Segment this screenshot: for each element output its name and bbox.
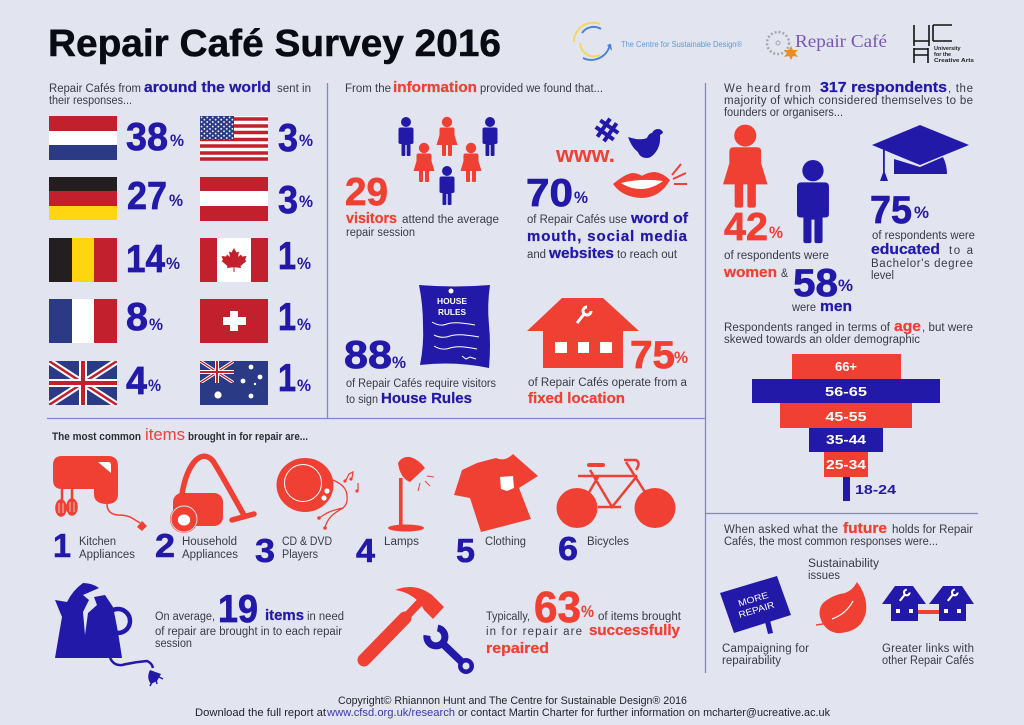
stat: 19 items per session: items [265, 607, 304, 624]
stat: 88%: 88 [344, 334, 392, 377]
age intro text: skewed towards an older demographic [724, 334, 920, 346]
label: household appliances [182, 536, 238, 561]
logo: Centre for Sustainable Design [574, 23, 742, 60]
stat: France 8%: 8 [126, 296, 148, 339]
stat: Netherlands 38%: % [170, 131, 184, 150]
stat: 75% fixed location [528, 334, 688, 407]
icon: house rules notice: HOUSE [437, 296, 467, 306]
stat: 88%: to sign [346, 394, 378, 406]
stat: 75% educated: Bachelor's degree [871, 258, 973, 270]
logo: University for the Creative Arts [914, 25, 974, 64]
stat: Austria 3%: % [299, 192, 313, 211]
label: sustainability issues [808, 558, 879, 582]
information intro text: From the [345, 83, 391, 95]
number: 6: 6 [558, 530, 578, 567]
stat: 88%: House Rules [381, 390, 472, 407]
countries intro text: sent in [277, 83, 311, 95]
items intro text: brought in for repair are... [188, 431, 308, 443]
logo: University for the Creative Arts: University [934, 46, 962, 52]
stat: 29 visitors: 29 [345, 171, 388, 214]
logos [574, 23, 974, 64]
stat: 75% educated: of respondents were [872, 230, 975, 242]
logo: Centre for Sustainable Design: The Centre for Sustainable Design® [621, 40, 742, 49]
flag: Australia [200, 361, 268, 405]
future intro text: Cafés, the most common responses were... [724, 536, 938, 548]
label: household appliances: Appliances [182, 549, 238, 561]
stat: 19 items per session: session [155, 638, 192, 650]
stat: 75% educated: % [914, 203, 929, 222]
icon: vacuum cleaner [170, 456, 254, 533]
stat: 75% educated: to a [949, 245, 974, 257]
icon: leaf [816, 582, 866, 633]
label: bicycles: Bicycles [587, 536, 629, 548]
label: clothing: Clothing [485, 536, 526, 548]
flag: Austria [200, 177, 268, 221]
icon: lamp [388, 457, 434, 532]
stat: Switzerland 1% [278, 296, 311, 339]
stat: Belgium 14%: % [166, 254, 180, 273]
stat: Australia 1%: % [297, 376, 311, 395]
stat: 63% successfully repaired: Typically, [486, 611, 530, 623]
stat: 42% women and 58% men: of respondents were [724, 250, 829, 262]
information intro text: information [393, 79, 477, 96]
stat: 70%: mouth, social media [527, 228, 688, 245]
future intro text: holds for Repair [892, 524, 973, 536]
stat: 19 items per session [155, 588, 344, 650]
panel: information [344, 79, 689, 407]
flag: Belgium [49, 238, 117, 282]
stat: 19 items per session: of repair are brought in to each repair [155, 626, 342, 638]
logo: Repair Café [767, 31, 887, 60]
icon: man [797, 160, 829, 243]
logo: University for the Creative Arts: Creative Arts [934, 58, 974, 64]
flag: United States [200, 116, 268, 160]
stat: 70%: of Repair Cafés use [527, 214, 627, 226]
respondents intro text: 317 respondents [820, 79, 947, 96]
stat: 42% women and 58% men: women [723, 264, 777, 281]
respondents intro text: , the [948, 83, 973, 95]
future intro text [724, 520, 973, 548]
stat: Australia 1% [278, 357, 311, 400]
countries intro text: Repair Cafés from [49, 83, 141, 95]
flag: Canada [200, 238, 268, 282]
icon: repair cafe building [527, 298, 639, 368]
stat: United States 3%: % [299, 131, 313, 150]
icon: woman [723, 125, 768, 208]
stat: 70%: 70 [526, 172, 573, 215]
icon: more repair sign [720, 576, 791, 634]
stat: 75% educated: 75 [870, 189, 912, 232]
items intro text [52, 425, 308, 444]
stat: Australia 1%: 1 [278, 357, 296, 400]
stat: Germany 27%: % [169, 191, 183, 210]
stat: United States 3%: 3 [278, 117, 298, 160]
bar: 56-65: 56-65 [825, 384, 867, 399]
stat: 63% successfully repaired: % [581, 602, 594, 621]
icon: broken kettle [55, 583, 163, 686]
stat: 70% [526, 172, 689, 262]
age intro text: age [894, 318, 921, 335]
stat: 75% fixed location: fixed location [528, 390, 625, 407]
label: greater links: other Repair Cafés [882, 655, 974, 667]
stat: 63% successfully repaired: in for repair are [486, 626, 582, 638]
stat: United States 3% [278, 117, 313, 160]
stat: 19 items per session: 19 [218, 588, 258, 631]
icon: bicycle [556, 460, 676, 528]
stat: 63% successfully repaired: 63 [534, 583, 581, 632]
panel: respondents [723, 79, 975, 501]
flag: France [49, 299, 117, 343]
bar: 25-34 [824, 452, 868, 477]
number: 4: 4 [356, 532, 376, 569]
chart: age pyramid [752, 354, 940, 501]
number: 3: 3 [255, 532, 275, 569]
icon: more repair sign: REPAIR [737, 599, 776, 620]
stat: 29 visitors: repair session [346, 227, 415, 239]
icon: more repair sign: MORE [737, 590, 770, 609]
age intro text [724, 318, 973, 346]
stat: 42% women and 58% men: & [781, 268, 788, 280]
icon: lips [613, 164, 687, 198]
stat: 75% educated [870, 189, 975, 282]
stat: 75% fixed location: of Repair Cafés operate from a [528, 377, 688, 389]
label: campaigning for repairability: repairability [722, 655, 781, 667]
bar: 66+: 66+ [835, 359, 857, 374]
flag: Switzerland [200, 299, 268, 343]
stat: 70%: word of [630, 210, 689, 227]
respondents intro text: founders or organisers... [724, 107, 843, 119]
age intro text: , but were [922, 322, 973, 334]
stat: 75% fixed location: % [674, 348, 688, 367]
label: CD and DVD players [282, 536, 332, 561]
label: greater links [882, 643, 974, 667]
future intro text: When asked what the [724, 524, 838, 536]
stat: United Kingdom 4%: % [148, 376, 161, 395]
label: campaigning for repairability [722, 643, 809, 667]
number: 2: 2 [155, 527, 175, 564]
stat: 70%: % [574, 188, 588, 207]
label: greater links: Greater links with [882, 643, 974, 655]
age intro text: Respondents ranged in terms of [724, 322, 891, 334]
bar: 35-44: 35-44 [826, 432, 867, 447]
footer credits: Download the full report at [195, 707, 326, 719]
items intro text: items [145, 425, 185, 444]
label: lamps: Lamps [384, 536, 419, 548]
stat: 70%: to reach out [617, 249, 678, 261]
label: kitchen appliances: Appliances [79, 549, 135, 561]
bar: 45-55: 45-55 [826, 409, 866, 424]
panel: common items [52, 425, 676, 569]
stat: 88% [344, 334, 496, 407]
stat: 75% fixed location: 75 [630, 334, 675, 377]
icon: hashtag [592, 115, 622, 145]
stat: Canada 1%: % [297, 254, 311, 273]
stat: 70%: websites [548, 245, 614, 262]
stat: 75% educated: level [871, 270, 894, 282]
label: CD and DVD players: CD & DVD [282, 536, 332, 548]
icon: linked repair cafes [882, 586, 974, 621]
stat: 29 visitors: visitors [346, 210, 397, 227]
stat: 75% educated: educated [871, 241, 940, 258]
icon: group of visitors [398, 117, 498, 205]
label: sustainability issues: Sustainability [808, 558, 879, 570]
title: Repair Café Survey 2016 [48, 23, 501, 65]
label: CD and DVD players: Players [282, 549, 318, 561]
stat: 63% successfully repaired: of items brought [598, 611, 682, 623]
bar: 18-24: 18-24 [855, 482, 897, 497]
bar: 25-34: 25-34 [826, 457, 867, 472]
stat: 42% women and 58% men: % [769, 223, 783, 242]
label: kitchen appliances: Kitchen [79, 536, 116, 548]
stat: 63% successfully repaired: successfully [589, 622, 681, 639]
icon: graduation cap [872, 125, 969, 181]
information intro text: provided we found that... [480, 83, 603, 95]
stat: 29 visitors: attend the average [402, 214, 499, 226]
stat: France 8%: % [149, 315, 163, 334]
stat: 29 visitors [345, 171, 499, 239]
icon: hand mixer [53, 456, 147, 531]
label: sustainability issues: issues [808, 570, 840, 582]
stat: Germany 27%: 27 [127, 175, 167, 218]
icon: house rules notice: RULES [438, 307, 466, 317]
footer credits: www.cfsd.org.uk/research [326, 707, 455, 719]
stat: 19 items per session: in need [307, 611, 344, 623]
logo: Repair Café: Repair Café [795, 31, 887, 51]
icon: t-shirt [454, 454, 538, 532]
flag: United Kingdom [49, 361, 117, 405]
stat: 19 items per session: On average, [155, 611, 215, 623]
respondents intro text [724, 79, 973, 119]
stat: 42% women and 58% men: men [820, 298, 852, 315]
bar: 18-24 [843, 477, 897, 501]
countries intro text: their responses... [49, 95, 132, 107]
label: kitchen appliances [79, 536, 135, 561]
stat: Canada 1% [278, 235, 311, 278]
future intro text: future [843, 520, 887, 537]
stat: Switzerland 1%: % [297, 315, 311, 334]
stat: France 8% [126, 296, 163, 339]
icon: www: www. [555, 142, 615, 167]
footer credits: or contact Martin Charter for further information on mcharter@ucreative.ac.uk [458, 707, 830, 719]
information intro text [345, 79, 603, 96]
bar: 56-65 [752, 379, 940, 403]
stat: 70%: and [527, 249, 546, 261]
respondents intro text: majority of which considered themselves to be [724, 95, 973, 107]
stat: Canada 1%: 1 [278, 235, 296, 278]
stat: United Kingdom 4%: 4 [126, 360, 147, 403]
bar: 45-55 [780, 403, 912, 428]
footer credits: Copyright© Rhiannon Hunt and The Centre for Sustainable Design® 2016 [338, 695, 687, 707]
panel: countries [49, 79, 313, 405]
bar: 35-44 [809, 428, 883, 452]
stat: 42% women and 58% men: 42 [724, 206, 768, 249]
icon: CD player [276, 458, 359, 530]
stat: Switzerland 1%: 1 [278, 296, 296, 339]
respondents intro text: We heard from [724, 83, 811, 95]
bar: 66+ [792, 354, 901, 379]
stat: 63% successfully repaired [486, 583, 682, 657]
stat: 42% women and 58% men: 58 [793, 262, 838, 305]
stat: 42% women and 58% men: were [791, 302, 816, 314]
logo: University for the Creative Arts: for the [934, 52, 951, 58]
icon: house rules notice [419, 285, 490, 368]
items intro text: The most common [52, 431, 141, 443]
stat: Austria 3%: 3 [278, 179, 298, 222]
icon: twitter bird [628, 129, 663, 158]
countries intro text: around the world [144, 79, 271, 96]
number: 1: 1 [53, 527, 71, 564]
stat: Belgium 14%: 14 [126, 238, 165, 281]
flag: Germany [49, 177, 117, 220]
flag: Netherlands [49, 116, 117, 160]
stat: United Kingdom 4% [126, 360, 161, 403]
stat: 88%: % [392, 353, 406, 372]
stat: 42% women and 58% men [723, 206, 853, 315]
stat: 63% successfully repaired: repaired [486, 640, 549, 657]
panel: future [720, 520, 974, 667]
stat: Austria 3% [278, 179, 313, 222]
icon: hammer and wrench [364, 587, 474, 674]
number: 5: 5 [456, 532, 475, 569]
stat: 42% women and 58% men: % [838, 276, 853, 295]
stat: 88%: of Repair Cafés require visitors [346, 378, 496, 390]
footer credits [195, 695, 830, 719]
countries intro text [49, 79, 311, 107]
label: household appliances: Household [182, 536, 237, 548]
stat: Netherlands 38%: 38 [126, 116, 168, 159]
label: campaigning for repairability: Campaigning for [722, 643, 809, 655]
